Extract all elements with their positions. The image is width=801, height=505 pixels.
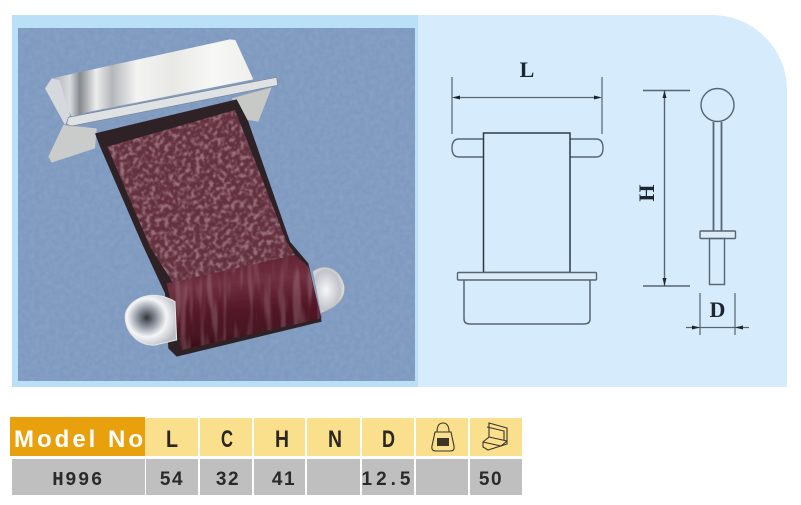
panel: photo frame (12, 15, 418, 387)
left pin (452, 139, 484, 157)
stem (714, 122, 722, 231)
dimension D (686, 293, 749, 335)
leather strap (107, 110, 295, 283)
leather dark backing (95, 99, 322, 357)
ball (701, 88, 734, 122)
metal right wedge (232, 87, 272, 122)
header labels: C (221, 426, 233, 453)
technical drawing: side view (634, 88, 749, 335)
header cells (145, 418, 522, 456)
dimension L: L (520, 57, 534, 82)
spec table (10, 417, 522, 495)
header labels (166, 426, 395, 453)
data values: 50 (479, 469, 503, 490)
header labels: D (382, 426, 395, 453)
photo: leather handle (18, 28, 415, 381)
collar (700, 231, 736, 238)
technical drawing: front view (452, 57, 603, 324)
icon: weight (432, 423, 454, 451)
shank (710, 238, 724, 284)
header labels: L (166, 426, 178, 453)
dimension H (634, 90, 690, 286)
data values: 54 (160, 469, 184, 490)
right pin (570, 139, 603, 157)
icon: box (483, 423, 507, 450)
metal left wedge (45, 78, 70, 125)
metal lower left wedge (48, 125, 97, 163)
metal top face (52, 39, 253, 117)
dimension H: H (634, 184, 659, 202)
data cells (12, 459, 522, 495)
metal front rail (67, 77, 278, 126)
dimension D: D (710, 297, 725, 322)
body (484, 133, 570, 272)
flange (458, 272, 596, 280)
header labels: H (275, 426, 289, 453)
data values: 32 (216, 469, 240, 490)
header: model number: Model No (14, 426, 143, 453)
header: model number (10, 417, 145, 456)
left ball (125, 295, 177, 345)
data values: 41 (272, 469, 296, 490)
data values: 12.5 (362, 469, 414, 490)
data values (52, 469, 503, 491)
panel: product background (12, 15, 787, 387)
cup (464, 280, 590, 324)
leather roll (167, 255, 322, 350)
right ball (313, 267, 345, 313)
dimension L (452, 57, 602, 134)
header labels: N (328, 426, 342, 453)
data values: H996 (52, 469, 104, 491)
